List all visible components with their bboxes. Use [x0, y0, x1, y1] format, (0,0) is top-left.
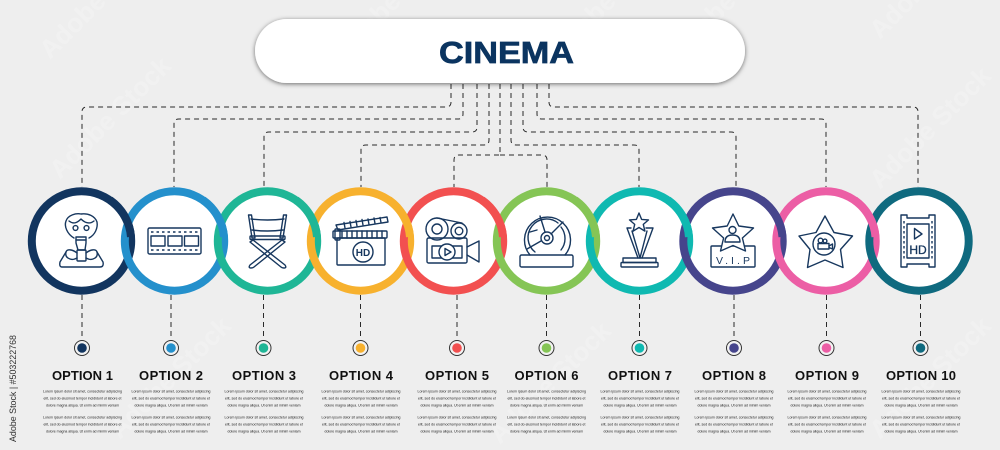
- body text: elit, sed do eiusmod tempor incididunt ut labore et: [882, 422, 960, 426]
- body text: [132, 390, 210, 434]
- option label: OPTION 7: [608, 368, 672, 383]
- body text: dolore magna aliqua. Ut enim ad minim veniam: [134, 404, 208, 408]
- body text: elit, sed do eiusmod tempor incididunt ut labore et: [132, 422, 210, 426]
- stem: [920, 295, 922, 340]
- panel: option 6: [497, 191, 596, 434]
- body text: Lorem ipsum dolor sit amet, consectetur adipiscing: [694, 390, 774, 394]
- body text: dolore magna aliqua. Ut enim ad minim veniam: [790, 430, 864, 434]
- body text: dolore magna aliqua. Ut enim ad minim veniam: [420, 430, 494, 434]
- stock id side label: Adobe Stock | #503222768: [8, 335, 19, 442]
- text: Adobe Stock: [863, 60, 997, 194]
- stem: [170, 295, 172, 340]
- body text: dolore magna aliqua. Ut enim ad minim veniam: [324, 404, 398, 408]
- marker dot: [353, 340, 368, 356]
- icon: film reel on stand: [520, 216, 573, 267]
- stem: [262, 295, 264, 340]
- marker dot: [913, 340, 928, 356]
- body text: Lorem ipsum dolor sit amet, consectetur adipiscing: [322, 416, 400, 420]
- body text: dolore magna aliqua. Ut enim ad minim veniam: [884, 430, 958, 434]
- icon: film strip: [148, 228, 201, 254]
- body text: elit, sed do eiusmod tempor incididunt ut labore et: [508, 396, 586, 400]
- body text: elit, sed do eiusmod tempor incididunt ut labore et: [44, 396, 122, 400]
- panel: option 7: [590, 191, 689, 434]
- body text: dolore magna aliqua. Ut enim ad minim veniam: [324, 430, 398, 434]
- body text: dolore magna aliqua. Ut enim ad minim veniam: [604, 430, 677, 434]
- icon: HD clapperboard: HD: [356, 248, 370, 259]
- title pill: [255, 19, 745, 83]
- option label: OPTION 8: [702, 368, 766, 383]
- option label: OPTION 9: [795, 368, 859, 383]
- body text: Lorem ipsum dolor sit amet, consectetur adipiscing: [788, 390, 866, 394]
- text: Adobe Stock: [483, 315, 617, 449]
- body text: Lorem ipsum dolor sit amet, consectetur adipiscing: [322, 390, 400, 394]
- body text: Lorem ipsum dolor sit amet, consectetur adipiscing: [132, 416, 210, 420]
- icon: HD clapperboard: [333, 217, 388, 265]
- body text: [694, 390, 774, 434]
- panel: option 1: [32, 191, 131, 434]
- marker dot: [164, 340, 178, 356]
- panel: option 2: [125, 191, 224, 434]
- marker dot: [726, 340, 742, 356]
- marker dot: [819, 340, 834, 356]
- body text: dolore magna aliqua. Ut enim ad minim veniam: [604, 404, 677, 408]
- option label: OPTION 1: [52, 368, 113, 383]
- body text: elit, sed do eiusmod tempor incididunt ut labore et: [695, 396, 773, 400]
- stem: [638, 295, 640, 340]
- stem: [733, 295, 735, 340]
- body text: elit, sed do eiusmod tempor incididunt ut labore et: [882, 396, 960, 400]
- body text: elit, sed do eiusmod tempor incididunt ut labore et: [225, 422, 303, 426]
- body text: dolore magna aliqua. Ut enim ad minim veniam: [510, 430, 583, 434]
- connector lines: [82, 84, 918, 187]
- body text: elit, sed do eiusmod tempor incididunt ut labore et: [322, 396, 400, 400]
- body text: [600, 390, 680, 434]
- body text: Lorem ipsum dolor sit amet, consectetur adipiscing: [694, 416, 774, 420]
- body text: dolore magna aliqua. Ut enim ad minim veniam: [134, 430, 208, 434]
- body text: dolore magna aliqua. Ut enim ad minim veniam: [46, 430, 119, 434]
- stem: [546, 295, 548, 340]
- body text: elit, sed do eiusmod tempor incididunt ut labore et: [508, 422, 586, 426]
- body text: Lorem ipsum dolor sit amet, consectetur adipiscing: [882, 390, 960, 394]
- icon: VIP star: V.I.P: [716, 255, 750, 267]
- body text: Lorem ipsum dolor sit amet, consectetur adipiscing: [507, 390, 586, 394]
- body text: dolore magna aliqua. Ut enim ad minim veniam: [884, 404, 958, 408]
- marker dot: [450, 340, 464, 356]
- title: CINEMA: [439, 36, 574, 70]
- body text: elit, sed do eiusmod tempor incididunt ut labore et: [225, 396, 303, 400]
- body text: [507, 390, 586, 434]
- body text: Lorem ipsum dolor sit amet, consectetur adipiscing: [600, 390, 680, 394]
- stem: [81, 295, 83, 340]
- body text: dolore magna aliqua. Ut enim ad minim veniam: [228, 404, 301, 408]
- option label: OPTION 4: [329, 368, 394, 383]
- marker dot: [74, 340, 90, 356]
- icon: HD film strip: [901, 215, 935, 267]
- option label: OPTION 10: [886, 368, 956, 383]
- body text: dolore magna aliqua. Ut enim ad minim veniam: [420, 404, 494, 408]
- body text: [43, 390, 122, 434]
- marker dot: [256, 340, 271, 356]
- body text: elit, sed do eiusmod tempor incididunt ut labore et: [44, 422, 122, 426]
- icon: movie camera: [426, 218, 479, 263]
- icon: HD film strip: HD: [909, 243, 927, 257]
- text: Adobe Stock: [103, 310, 237, 444]
- body text: dolore magna aliqua. Ut enim ad minim veniam: [790, 404, 864, 408]
- panel: option 9: [776, 191, 876, 434]
- panel: option 10: [869, 191, 969, 434]
- body text: [882, 390, 960, 434]
- icon: film star with bow tie: [60, 214, 103, 267]
- body text: [224, 390, 304, 434]
- marker dot: [539, 340, 554, 356]
- body text: elit, sed do eiusmod tempor incididunt ut labore et: [132, 396, 210, 400]
- icon: star with camera: [799, 216, 852, 268]
- body text: Lorem ipsum dolor sit amet, consectetur adipiscing: [600, 416, 680, 420]
- icon: director chair: [248, 215, 286, 268]
- body text: Lorem ipsum dolor sit amet, consectetur adipiscing: [507, 416, 586, 420]
- icon: VIP star: [711, 214, 755, 267]
- body text: dolore magna aliqua. Ut enim ad minim veniam: [698, 404, 771, 408]
- option label: OPTION 2: [139, 368, 203, 383]
- body text: dolore magna aliqua. Ut enim ad minim veniam: [46, 404, 119, 408]
- stem: [360, 295, 362, 340]
- text: Adobe Stock: [863, 310, 997, 444]
- stem: [826, 295, 828, 340]
- body text: Lorem ipsum dolor sit amet, consectetur adipiscing: [132, 390, 210, 394]
- panel: option 5: [404, 191, 503, 434]
- body text: Lorem ipsum dolor sit amet, consectetur adipiscing: [224, 416, 304, 420]
- panel: option 3: [218, 191, 317, 434]
- panel: option 4: [311, 191, 410, 434]
- body text: elit, sed do eiusmod tempor incididunt ut labore et: [695, 422, 773, 426]
- body text: elit, sed do eiusmod tempor incididunt ut labore et: [418, 396, 496, 400]
- option label: OPTION 5: [425, 368, 489, 383]
- body text: [418, 390, 496, 434]
- body text: elit, sed do eiusmod tempor incididunt ut labore et: [788, 396, 866, 400]
- panel: option 8: [683, 191, 783, 434]
- body text: [322, 390, 400, 434]
- body text: elit, sed do eiusmod tempor incididunt ut labore et: [601, 396, 679, 400]
- body text: Lorem ipsum dolor sit amet, consectetur adipiscing: [418, 390, 496, 394]
- stem: [456, 295, 458, 340]
- body text: Lorem ipsum dolor sit amet, consectetur adipiscing: [43, 390, 122, 394]
- option label: OPTION 3: [232, 368, 296, 383]
- option label: OPTION 6: [514, 368, 578, 383]
- body text: dolore magna aliqua. Ut enim ad minim veniam: [228, 430, 301, 434]
- body text: dolore magna aliqua. Ut enim ad minim veniam: [698, 430, 771, 434]
- body text: Lorem ipsum dolor sit amet, consectetur adipiscing: [788, 416, 866, 420]
- body text: elit, sed do eiusmod tempor incididunt ut labore et: [418, 422, 496, 426]
- body text: [788, 390, 866, 434]
- icon: star trophy: [621, 213, 658, 267]
- body text: Lorem ipsum dolor sit amet, consectetur adipiscing: [418, 416, 496, 420]
- body text: Lorem ipsum dolor sit amet, consectetur adipiscing: [882, 416, 960, 420]
- body text: elit, sed do eiusmod tempor incididunt ut labore et: [788, 422, 866, 426]
- body text: Lorem ipsum dolor sit amet, consectetur adipiscing: [224, 390, 304, 394]
- text: Adobe Stock: [43, 50, 177, 184]
- body text: Lorem ipsum dolor sit amet, consectetur adipiscing: [43, 416, 122, 420]
- circle backgrounds: [32, 191, 969, 291]
- body text: elit, sed do eiusmod tempor incididunt ut labore et: [322, 422, 400, 426]
- body text: elit, sed do eiusmod tempor incididunt ut labore et: [601, 422, 679, 426]
- marker dot: [632, 340, 647, 356]
- body text: dolore magna aliqua. Ut enim ad minim veniam: [510, 404, 583, 408]
